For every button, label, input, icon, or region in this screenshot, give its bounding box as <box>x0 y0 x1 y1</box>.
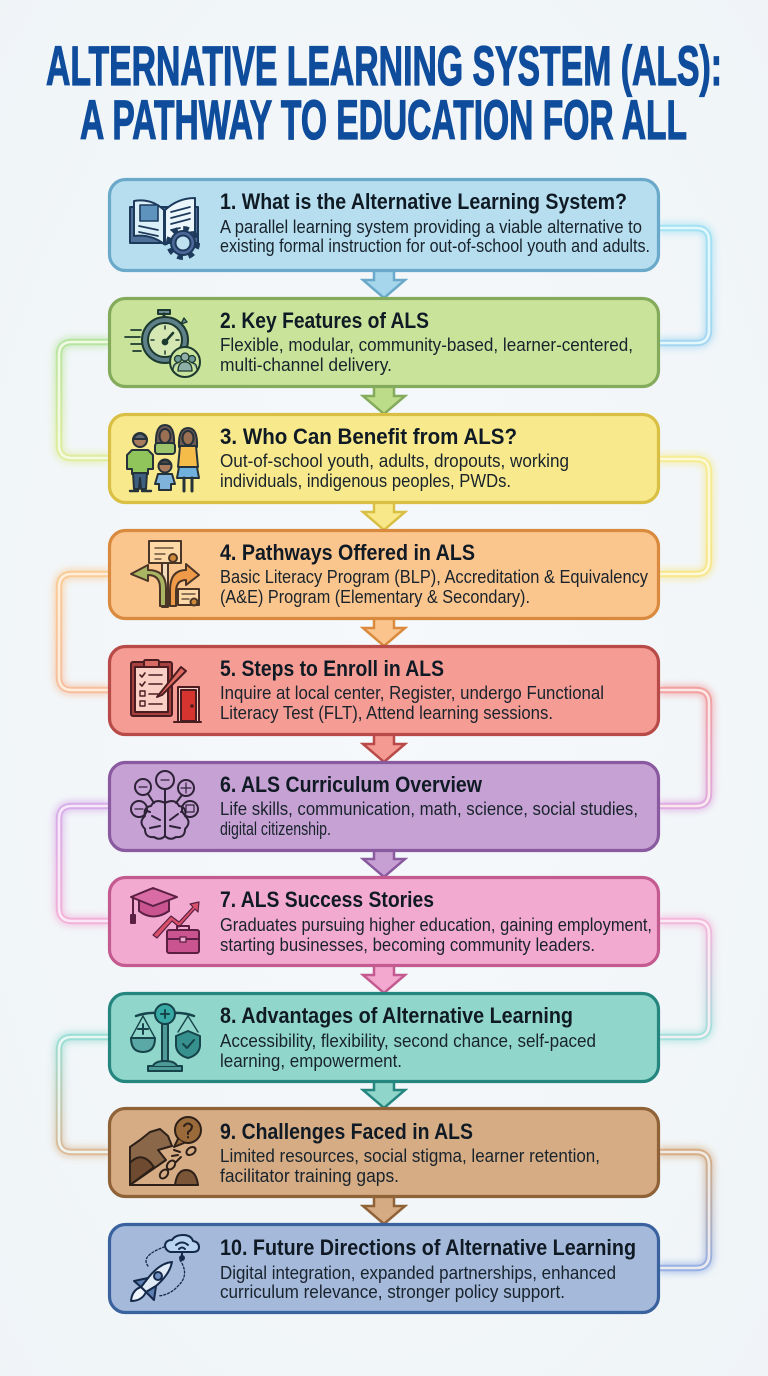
heading: 8. Advantages of Alternative Learning <box>220 1003 573 1028</box>
arrow: step 7 to 8 <box>363 964 405 993</box>
description <box>220 1262 616 1302</box>
description: Basic Literacy Program (BLP), Accreditation & Equivalency <box>220 566 649 587</box>
panel: step 3 <box>110 414 658 502</box>
description <box>220 914 652 955</box>
connector: step 9 to step 10 <box>659 1152 709 1268</box>
arrow: step 8 to 9 <box>363 1080 405 1108</box>
heading: 6. ALS Curriculum Overview <box>220 772 483 797</box>
description: Flexible, modular, community-based, learner-centered, <box>220 334 633 355</box>
panel: step 4 <box>110 530 658 618</box>
connector: step 1 to step 2 <box>659 228 709 343</box>
panel: step 5 <box>110 646 658 734</box>
description: Literacy Test (FLT), Attend learning sessions. <box>220 702 553 723</box>
description <box>220 566 649 607</box>
description <box>220 334 633 375</box>
description <box>220 216 650 256</box>
icon: stopwatch and group <box>125 310 200 377</box>
description: Inquire at local center, Register, undergo Functional <box>220 682 604 703</box>
arrow: step 1 to 2 <box>363 270 405 298</box>
description: Digital integration, expanded partnerships, enhanced <box>220 1262 616 1283</box>
connector: step 7 to step 8 <box>659 921 709 1037</box>
description: Graduates pursuing higher education, gaining employment, <box>220 914 652 935</box>
description <box>220 1030 596 1071</box>
connector: step 4 to step 5 <box>59 574 109 690</box>
panel: step 1 <box>110 180 658 270</box>
panel: step 2 <box>110 298 658 386</box>
icon: rocky mountain, broken chain, question bubble <box>130 1117 201 1185</box>
heading: 10. Future Directions of Alternative Learning <box>220 1235 636 1260</box>
connector: step 5 to step 6 <box>659 690 709 806</box>
connector: step 8 to step 9 <box>59 1037 109 1152</box>
description: learning, empowerment. <box>220 1050 402 1071</box>
description: individuals, indigenous peoples, PWDs. <box>220 470 511 491</box>
heading: 2. Key Features of ALS <box>220 308 429 333</box>
connector: step 2 to step 3 <box>59 342 109 458</box>
panel: step 10 <box>110 1224 658 1312</box>
icon: book and gear <box>130 198 198 258</box>
connector: step 6 to step 7 <box>59 806 109 921</box>
panel: step 9 <box>110 1108 658 1196</box>
panel: step 8 <box>110 994 658 1082</box>
heading: 1. What is the Alternative Learning System? <box>220 189 627 214</box>
description: curriculum relevance, stronger policy support. <box>220 1281 565 1302</box>
heading: 3. Who Can Benefit from ALS? <box>220 424 517 449</box>
description: existing formal instruction for out-of-school youth and adults. <box>220 235 650 256</box>
heading: 4. Pathways Offered in ALS <box>220 540 475 565</box>
description: digital citizenship. <box>220 818 331 839</box>
heading: 5. Steps to Enroll in ALS <box>220 656 444 681</box>
description <box>220 682 604 723</box>
description <box>220 1145 600 1186</box>
icon: rocket and wifi cloud <box>131 1235 199 1301</box>
description: Limited resources, social stigma, learner retention, <box>220 1145 600 1166</box>
title <box>46 34 722 151</box>
description: Life skills, communication, math, science, social studies, <box>220 798 638 819</box>
icon: balance scale and shield <box>131 1004 200 1071</box>
arrow: step 4 to 5 <box>363 617 405 646</box>
icon: crossroads and certificates <box>131 541 199 607</box>
icon: checklist, pencil and door <box>131 660 201 722</box>
icon: graduation cap, growth arrow, briefcase <box>131 888 199 953</box>
connector: step 3 to step 4 <box>659 459 709 574</box>
description: (A&E) Program (Elementary & Secondary). <box>220 586 530 607</box>
description: Accessibility, flexibility, second chance, self-paced <box>220 1030 596 1051</box>
description: starting businesses, becoming community leaders. <box>220 934 595 955</box>
arrow: step 2 to 3 <box>363 386 405 414</box>
heading: 7. ALS Success Stories <box>220 887 434 912</box>
description: A parallel learning system providing a viable alternative to <box>220 216 642 237</box>
description: facilitator training gaps. <box>220 1165 399 1186</box>
arrow: step 5 to 6 <box>363 733 405 762</box>
panel: step 6 <box>110 762 658 850</box>
arrow: step 6 to 7 <box>363 849 405 877</box>
panel: step 7 <box>110 878 658 966</box>
description: multi-channel delivery. <box>220 354 392 375</box>
heading: 9. Challenges Faced in ALS <box>220 1119 473 1144</box>
icon: brain with topic bubbles <box>131 771 198 839</box>
description <box>220 450 569 491</box>
description <box>220 798 638 839</box>
arrow: step 9 to 10 <box>363 1195 405 1224</box>
arrow: step 3 to 4 <box>363 501 405 530</box>
icon: family <box>127 425 199 491</box>
description: Out-of-school youth, adults, dropouts, working <box>220 450 569 471</box>
